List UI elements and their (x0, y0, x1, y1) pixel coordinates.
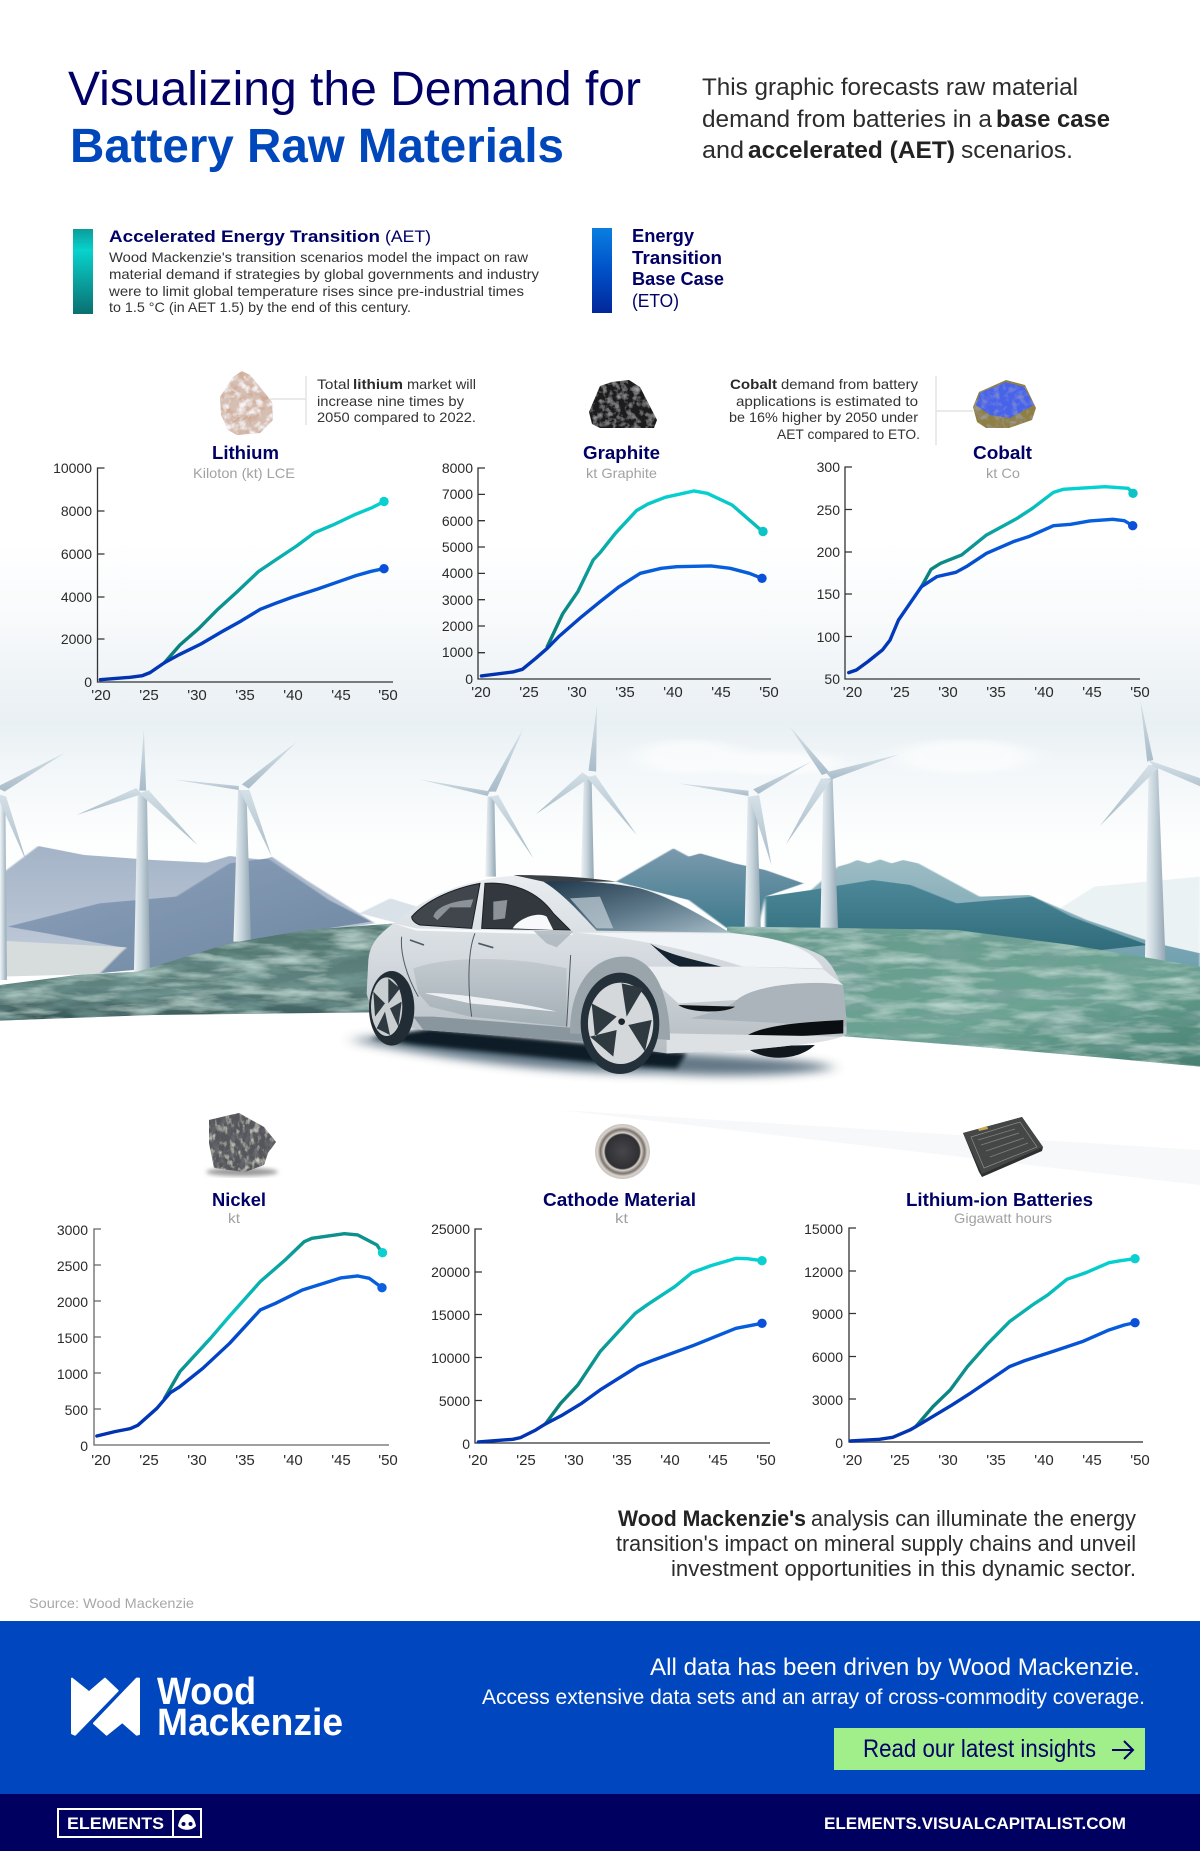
icon: graphite rock (589, 380, 657, 428)
x labels: Li-ion: '30 (938, 1452, 958, 1469)
y labels: Nickel: 0 (80, 1438, 88, 1454)
windshield (543, 881, 730, 933)
closing statement: Wood Mackenzie's (618, 1506, 806, 1531)
intro text: This graphic forecasts raw material (702, 74, 1078, 101)
axes: Lithium (98, 468, 393, 682)
lines: Graphite (481, 491, 763, 676)
unit label: Cathode: kt (615, 1210, 628, 1226)
x labels: Cobalt: '20 (843, 684, 862, 701)
hood (577, 933, 823, 968)
front wheel (570, 957, 670, 1074)
source: Source: Wood Mackenzie (29, 1595, 194, 1611)
intro text: and (702, 137, 744, 164)
band text (482, 1654, 1145, 1709)
y labels: Li-ion (804, 1221, 843, 1451)
lines: Cobalt (849, 487, 1133, 673)
x labels: Li-ion (843, 1452, 1150, 1469)
y labels: Cobalt: 50 (824, 671, 840, 687)
axes: Cathode (475, 1229, 770, 1443)
x labels: Cathode: '20 (468, 1452, 488, 1469)
y labels: Graphite: 2000 (442, 618, 473, 634)
x labels: Lithium (91, 687, 398, 704)
callout: lithium: increase nine times by (317, 393, 464, 409)
x labels: Cathode: '30 (564, 1452, 584, 1469)
front fascia (690, 983, 847, 1027)
y labels: Lithium: 8000 (61, 503, 92, 519)
y labels: Cobalt: 250 (817, 502, 840, 518)
y labels: Graphite: 1000 (442, 644, 473, 660)
end points: Li-ion (1130, 1254, 1140, 1327)
x labels: Cobalt: '35 (986, 684, 1006, 701)
chart: Lithium (53, 443, 398, 704)
y labels: Cathode: 5000 (439, 1393, 470, 1409)
left hill (0, 923, 429, 1021)
logo: Wood Mackenzie: Mackenzie (157, 1702, 343, 1744)
unit label: Cobalt: kt Co (986, 465, 1020, 481)
title: Battery Raw Materials (70, 120, 564, 173)
y labels: Cathode: 25000 (431, 1221, 470, 1237)
y labels: Nickel (57, 1222, 88, 1454)
x labels: Nickel: '20 (91, 1452, 111, 1469)
door panels (413, 959, 567, 1027)
x labels: Nickel: '50 (378, 1452, 398, 1469)
callout: lithium: 2050 compared to 2022. (317, 409, 476, 425)
y labels: Nickel: 1000 (57, 1366, 88, 1382)
y labels: Li-ion: 15000 (804, 1221, 843, 1237)
y labels: Graphite: 3000 (442, 592, 473, 608)
legend: ETO: Transition (632, 248, 722, 268)
callout: lithium: market will (407, 376, 476, 392)
legend: AET (73, 227, 539, 315)
y labels: Nickel: 500 (65, 1402, 88, 1418)
x labels: Graphite (471, 684, 779, 701)
x labels: Cathode (468, 1452, 776, 1469)
y labels: Lithium: 2000 (61, 631, 92, 647)
x labels: Cobalt: '50 (1130, 684, 1150, 701)
panel: blue call-to-action band (0, 1621, 1200, 1794)
chart title: Lithium: Lithium (212, 443, 279, 463)
chart title: Cobalt: Cobalt (973, 443, 1032, 463)
chart: Cathode Material (431, 1190, 776, 1469)
callout: lithium: Total (317, 376, 350, 392)
axes: Cobalt (845, 467, 1140, 679)
y labels: Lithium: 10000 (53, 460, 92, 476)
car shadow (350, 1037, 833, 1075)
mountains right (616, 848, 1200, 970)
legend: ETO (592, 226, 724, 313)
x labels: Cobalt: '45 (1082, 684, 1102, 701)
headlight (650, 943, 740, 974)
x labels: Cathode: '25 (516, 1452, 536, 1469)
lines: Li-ion (851, 1259, 1135, 1441)
x labels: Li-ion: '40 (1034, 1452, 1054, 1469)
x labels: Li-ion: '35 (986, 1452, 1006, 1469)
legend: AET: Wood Mackenzie's transition scenarios model the impact on raw (109, 249, 529, 265)
y labels: Cobalt: 300 (817, 459, 840, 475)
callout: lithium: lithium (353, 376, 403, 392)
front-right tyre (745, 1045, 815, 1058)
intro text: scenarios. (961, 137, 1073, 164)
axes: Graphite (478, 468, 771, 679)
x labels: Cobalt: '30 (938, 684, 958, 701)
y labels: Lithium: 0 (84, 674, 92, 690)
y labels: Li-ion: 9000 (812, 1306, 843, 1322)
x labels: Graphite: '50 (759, 684, 779, 701)
legend: AET: Accelerated Energy Transition (109, 227, 380, 246)
callout: cobalt: applications is estimated to (736, 393, 918, 409)
footer band (0, 1794, 1200, 1851)
x labels: Nickel: '40 (283, 1452, 303, 1469)
chart title: Cathode Material: Cathode Material (543, 1190, 696, 1210)
x labels: Cobalt: '25 (890, 684, 910, 701)
rear wheel (369, 971, 414, 1046)
mirror (513, 915, 553, 930)
x labels: Nickel: '45 (331, 1452, 351, 1469)
chart: Graphite (442, 443, 779, 701)
chart title: Lithium-ion Batteries: Lithium-ion Batteries (906, 1190, 1093, 1210)
background scene: wind farm landscape (0, 540, 1200, 1185)
x labels: Graphite: '40 (663, 684, 683, 701)
y labels: Nickel: 1500 (57, 1330, 88, 1346)
x labels: Graphite: '35 (615, 684, 635, 701)
end points: Lithium (379, 497, 389, 573)
right hill (727, 927, 1200, 1067)
logo: Wood Mackenzie (72, 1671, 343, 1744)
x labels: Lithium: '45 (331, 687, 351, 704)
closing statement: investment opportunities in this dynamic sector. (671, 1556, 1136, 1581)
y labels: Cathode (431, 1221, 470, 1452)
band text: Access extensive data sets and an array of cross-commodity coverage. (482, 1686, 1145, 1709)
icon: nickel rock (206, 1113, 278, 1176)
y labels: Cathode: 10000 (431, 1350, 470, 1366)
x labels: Cathode: '45 (708, 1452, 728, 1469)
mountains left (0, 846, 417, 977)
y labels: Li-ion: 3000 (812, 1392, 843, 1408)
legend: AET: material demand if strategies by global governments and industry (109, 266, 539, 282)
lines: Cathode (478, 1258, 762, 1442)
x labels: Lithium: '40 (283, 687, 303, 704)
end points: Graphite (757, 527, 768, 583)
callout: cobalt: be 16% higher by 2050 under (729, 409, 918, 425)
closing statement: analysis can illuminate the energy (811, 1506, 1136, 1531)
windows (412, 883, 480, 928)
unit label: Nickel: kt (228, 1210, 240, 1226)
x labels: Nickel: '25 (139, 1452, 159, 1469)
logo: Elements (58, 1809, 201, 1837)
x labels: Lithium: '50 (378, 687, 398, 704)
y labels: Lithium (53, 460, 92, 690)
y labels: Cobalt: 150 (817, 586, 840, 602)
axes: Nickel (94, 1229, 389, 1445)
chart title: Nickel: Nickel (212, 1190, 266, 1210)
y labels: Cathode: 0 (462, 1436, 470, 1452)
lines: Lithium (100, 502, 384, 680)
y labels: Graphite: 0 (465, 671, 473, 687)
chart title: Graphite: Graphite (583, 443, 660, 463)
x labels: Cathode: '40 (660, 1452, 680, 1469)
y labels: Nickel: 2000 (57, 1294, 88, 1310)
x labels: Lithium: '30 (187, 687, 207, 704)
y labels: Li-ion: 6000 (812, 1349, 843, 1365)
intro text: demand from batteries in a (702, 106, 993, 133)
x labels: Cobalt (843, 684, 1150, 701)
closing statement (616, 1506, 1136, 1581)
end points: Cobalt (1128, 489, 1138, 530)
button: read our latest insights (834, 1728, 1145, 1770)
x labels: Graphite: '45 (711, 684, 731, 701)
footer url: ELEMENTS.VISUALCAPITALIST.COM (824, 1814, 1126, 1833)
y labels: Graphite: 4000 (442, 565, 473, 581)
y labels: Graphite: 6000 (442, 513, 473, 529)
icon: cathode coin (595, 1124, 650, 1179)
y labels: Cathode: 15000 (431, 1307, 470, 1323)
x labels: Nickel: '30 (187, 1452, 207, 1469)
chart: Cobalt (817, 443, 1150, 701)
intro text: base case (996, 106, 1110, 133)
car body (367, 876, 847, 1053)
door lines (401, 933, 571, 1027)
y labels: Graphite: 5000 (442, 539, 473, 555)
intro text: accelerated (AET) (748, 137, 955, 164)
y labels: Lithium: 4000 (61, 589, 92, 605)
legend: AET: were to limit global temperature rises since pre-industrial times (108, 283, 524, 299)
x labels: Graphite: '25 (519, 684, 539, 701)
axes: Li-ion (849, 1228, 1143, 1442)
title: Visualizing the Demand for (68, 63, 641, 116)
y labels: Cobalt (817, 459, 840, 687)
y labels: Graphite (442, 460, 473, 687)
y labels: Graphite: 7000 (442, 486, 473, 502)
x labels: Graphite: '30 (567, 684, 587, 701)
car (350, 875, 847, 1075)
icon: lithium-ion battery (963, 1117, 1043, 1177)
y labels: Nickel: 2500 (57, 1258, 88, 1274)
icon: arrow (1112, 1741, 1133, 1759)
intro text (702, 74, 1110, 164)
callout: cobalt: demand from battery (781, 376, 918, 392)
lines: Nickel (97, 1234, 382, 1436)
y labels: Nickel: 3000 (57, 1222, 88, 1238)
end points: Cathode (757, 1256, 767, 1328)
callout: lithium (270, 376, 476, 425)
y labels: Li-ion: 0 (835, 1435, 843, 1451)
button: read our latest insights: Read our latest insights (863, 1735, 1096, 1763)
x labels: Lithium: '20 (91, 687, 111, 704)
band text: All data has been driven by Wood Mackenzie. (650, 1654, 1140, 1681)
x labels: Lithium: '35 (235, 687, 255, 704)
end points: Nickel (377, 1248, 387, 1292)
y labels: Li-ion: 12000 (804, 1264, 843, 1280)
legend: ETO: (ETO) (632, 291, 679, 311)
unit label: Graphite: kt Graphite (586, 465, 657, 481)
x labels: Cathode: '35 (612, 1452, 632, 1469)
x labels: Nickel: '35 (235, 1452, 255, 1469)
y labels: Cathode: 20000 (431, 1264, 470, 1280)
wind turbines (0, 700, 1200, 980)
x labels: Nickel (91, 1452, 398, 1469)
callout: cobalt: AET compared to ETO. (777, 426, 920, 442)
callout: cobalt (729, 376, 973, 445)
y labels: Cobalt: 200 (817, 544, 840, 560)
x labels: Li-ion: '50 (1130, 1452, 1150, 1469)
logo: Elements: ELEMENTS (67, 1814, 164, 1833)
legend: ETO: Energy (632, 226, 694, 246)
title (68, 63, 641, 173)
logo: Wood Mackenzie: Wood (157, 1671, 256, 1713)
chart: Lithium-ion Batteries (804, 1190, 1150, 1469)
y labels: Graphite: 8000 (442, 460, 473, 476)
icon: lithium rock (220, 371, 273, 435)
legend: ETO: Base Case (632, 269, 724, 289)
door handles (410, 940, 493, 948)
chart: Nickel (57, 1190, 398, 1469)
closing statement: transition's impact on mineral supply chains and unveil (616, 1531, 1136, 1556)
x labels: Lithium: '25 (139, 687, 159, 704)
legend: AET: to 1.5 °C (in AET 1.5) by the end of this century. (109, 299, 411, 315)
logo mark (72, 1679, 139, 1735)
x labels: Li-ion: '25 (890, 1452, 910, 1469)
icon: cobalt rock (973, 380, 1036, 428)
x labels: Cobalt: '40 (1034, 684, 1054, 701)
x labels: Graphite: '20 (471, 684, 491, 701)
unit label: Lithium: Kiloton (kt) LCE (193, 465, 295, 481)
unit label: Li-ion: Gigawatt hours (954, 1210, 1052, 1226)
x labels: Cathode: '50 (756, 1452, 776, 1469)
y labels: Lithium: 6000 (61, 546, 92, 562)
y labels: Cobalt: 100 (817, 629, 840, 645)
x labels: Li-ion: '45 (1082, 1452, 1102, 1469)
callout: cobalt: Cobalt (730, 376, 777, 392)
legend: AET: (AET) (385, 227, 431, 246)
x labels: Li-ion: '20 (843, 1452, 862, 1469)
